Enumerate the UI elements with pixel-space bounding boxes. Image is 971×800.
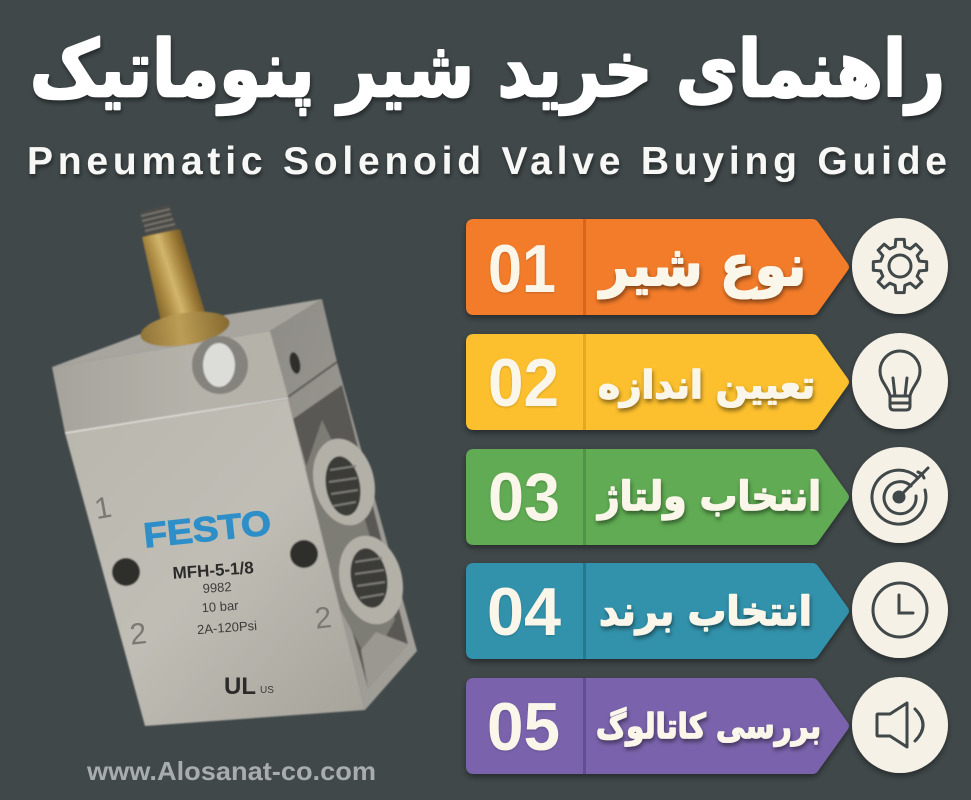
mounting holes <box>112 540 318 586</box>
step 03 banner: انتخاب ولتاژ <box>596 474 821 520</box>
connector thread <box>140 205 178 237</box>
valve markings: 2 <box>128 617 148 652</box>
step 04 icon: clock <box>852 562 948 658</box>
website url: www.Alosanat-co.com <box>86 756 376 786</box>
step 01 icon: gear <box>852 218 948 314</box>
valve markings: 10 bar <box>201 598 240 615</box>
step 04 banner <box>466 563 849 659</box>
valve markings: MFH-5-1/8 <box>172 558 254 583</box>
step 05 banner: بررسی کاتالوگ <box>596 706 821 747</box>
valve markings: 2 <box>313 601 333 636</box>
step 01 banner: 01 <box>488 231 556 307</box>
valve product illustration <box>52 205 417 726</box>
step 03 banner: 03 <box>488 459 560 535</box>
step 03 banner <box>466 449 849 545</box>
brass stem <box>142 229 205 322</box>
valve lower body front <box>65 399 365 726</box>
step 05 banner: 05 <box>487 689 560 765</box>
step 02 banner: تعیین اندازه <box>598 363 815 407</box>
valve markings: FESTO <box>142 503 273 556</box>
valve markings: US <box>260 685 274 696</box>
subtitle: Pneumatic Solenoid Valve Buying Guide <box>27 140 947 183</box>
step 03 icon: target <box>852 447 948 543</box>
valve markings: 9982 <box>202 579 232 596</box>
valve markings: 1 <box>92 491 114 526</box>
step 04 banner: 04 <box>487 574 561 650</box>
step 05 banner <box>466 678 849 774</box>
step 02 banner <box>466 334 849 430</box>
valve markings <box>92 491 333 700</box>
valve top face <box>52 299 322 367</box>
valve markings: UL <box>224 673 256 700</box>
bolt <box>192 336 248 394</box>
step 01 banner: نوع شیر <box>597 234 806 299</box>
hex nut <box>138 306 232 352</box>
valve markings: 2A-120Psi <box>197 618 258 637</box>
step 02 icon: light bulb <box>852 333 948 429</box>
step 02 banner: 02 <box>488 345 559 421</box>
step 01 banner <box>466 219 849 315</box>
step 05 icon: speaker <box>852 677 948 773</box>
valve upper block front <box>52 331 288 433</box>
valve right side <box>270 299 417 710</box>
step 04 banner: انتخاب برند <box>599 589 812 635</box>
